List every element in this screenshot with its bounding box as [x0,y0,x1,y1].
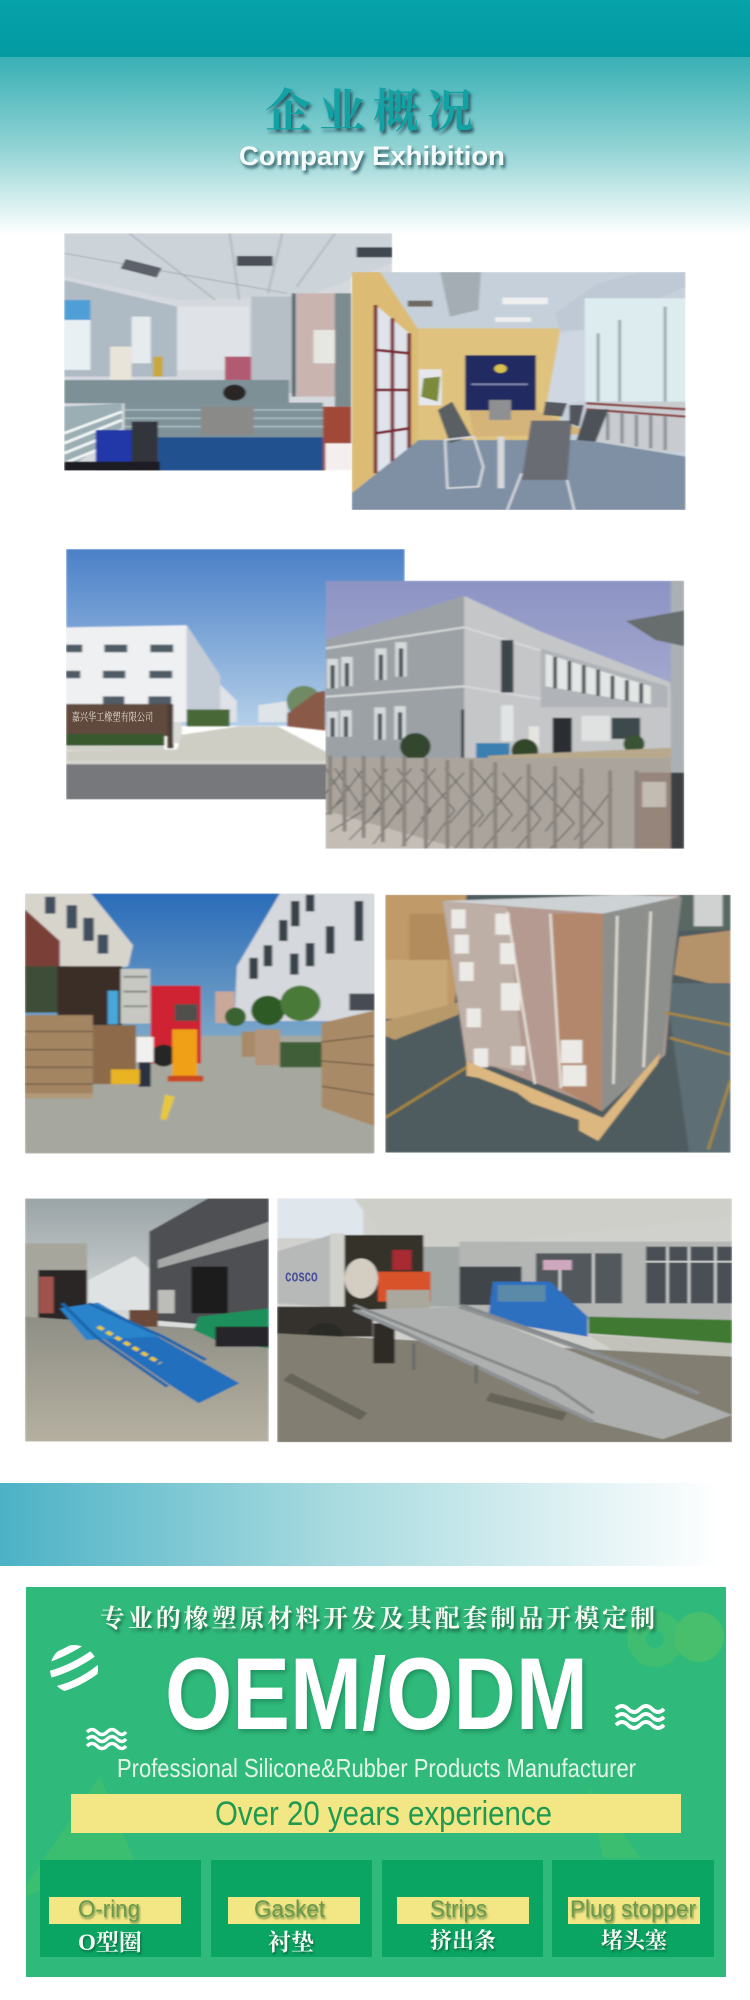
header gradient [0,57,750,235]
icon: waves left [87,1730,126,1748]
photo: wrapped pallet [385,895,731,1153]
panel background [26,1587,726,1977]
subtitle: Professional Silicone&Rubber Products Manufacturer [117,1753,636,1783]
product card: Gasket: Gasket [254,1896,325,1923]
decorative triangles [26,1776,641,1896]
product card: Gasket: 衬垫 [268,1930,314,1955]
photo: meeting room [352,272,686,510]
decorative blobs [627,1611,724,1667]
teal gradient band [0,1483,750,1566]
product card: Strips [382,1860,543,1957]
heading: OEM/ODM: OEM/ODM [165,1637,588,1751]
panel: OEM/ODM [26,1587,726,1977]
yellow bar: experience [71,1794,681,1833]
top teal band [0,0,750,57]
product card: O-ring: O-ring [78,1896,140,1923]
product card: O-ring: O型圈 [78,1930,142,1955]
title: English: Company Exhibition [239,141,505,171]
product card: Gasket [211,1860,372,1957]
photo: silver loading ramp [277,1198,732,1442]
product card: O-ring [40,1860,201,1957]
photo: blue loading ramp [25,1198,269,1442]
photo: factory building [325,581,684,849]
sign text: 嘉兴华工橡塑有限公司 [72,710,153,723]
icon: striped ball [50,1645,98,1691]
product card: Plug stopper: Plug stopper [570,1896,696,1923]
product card: Plug stopper: 堵头塞 [601,1928,667,1953]
product card: Plug stopper [552,1860,714,1957]
yellow bar: experience: Over 20 years experience [215,1795,552,1833]
product card: Strips: 挤出条 [430,1928,496,1953]
title: Chinese: 企业概况 [265,86,481,137]
slogan: Chinese: 专业的橡塑原材料开发及其配套制品开模定制 [100,1604,655,1633]
photo: truck loading cartons [24,893,375,1154]
photo: office [64,233,392,473]
photo: factory entrance [66,549,405,800]
photo: silver loading ramp: cosco [285,1267,318,1286]
product card: Strips: Strips [430,1896,487,1923]
icon: waves right [616,1706,664,1728]
